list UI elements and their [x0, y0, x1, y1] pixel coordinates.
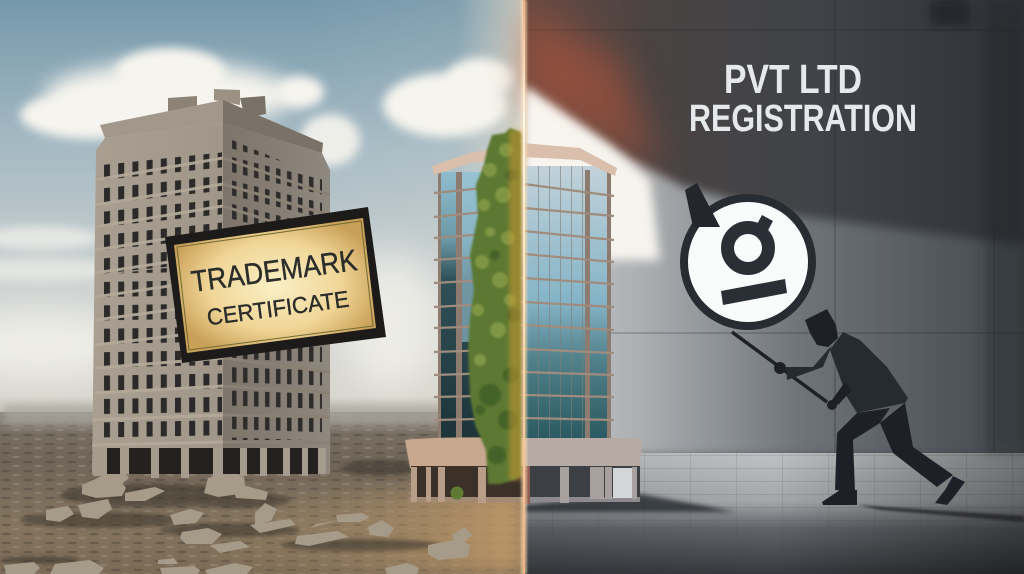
trademark certificate plaque: [165, 207, 386, 363]
ivy: [450, 128, 524, 500]
floor ledges: [434, 184, 614, 420]
torso: [830, 332, 908, 413]
windows: [102, 150, 222, 275]
roof cornice: [100, 100, 223, 138]
icon: round sign on pole: [680, 183, 827, 402]
certificate text: [189, 244, 359, 330]
glass shaft right: [524, 166, 611, 438]
light beam on wall: [524, 92, 1024, 456]
central split building: [405, 128, 642, 504]
title: PVT LTD Registration: PVT LTD: [724, 56, 862, 102]
floor shadow: [524, 494, 735, 512]
glass shaft left: [438, 172, 524, 440]
hand rear: [827, 400, 837, 410]
ground floor columns: [105, 448, 325, 474]
roof: [432, 143, 617, 176]
left classical building: [92, 89, 330, 478]
panel: right dark concrete scene: [524, 0, 1024, 574]
rooftop blocks: [168, 96, 197, 118]
panel: left wasteland scene: [0, 0, 524, 574]
silhouette: man pushing sign: [774, 309, 965, 505]
left facade: [92, 123, 223, 474]
arm front: [786, 345, 832, 380]
shoes: [822, 490, 857, 505]
glowing centre seam: [521, 0, 527, 574]
front leg: [835, 408, 890, 492]
hat and head: [805, 309, 838, 347]
title: PVT LTD Registration: REGISTRATION: [689, 98, 917, 140]
title: PVT LTD Registration: [689, 56, 917, 140]
wall panel seams: [524, 0, 1024, 453]
rubble: [0, 460, 472, 574]
right facade: [223, 123, 330, 474]
podium: [405, 437, 524, 468]
rear leg: [880, 403, 953, 487]
clouds: [0, 48, 514, 390]
hand front: [774, 362, 786, 374]
certificate text: TRADEMARK: [189, 244, 359, 299]
ledges: [92, 158, 223, 445]
rust glow: [524, 10, 660, 170]
arm rear: [832, 382, 852, 405]
certificate text: CERTIFICATE: [205, 286, 351, 330]
